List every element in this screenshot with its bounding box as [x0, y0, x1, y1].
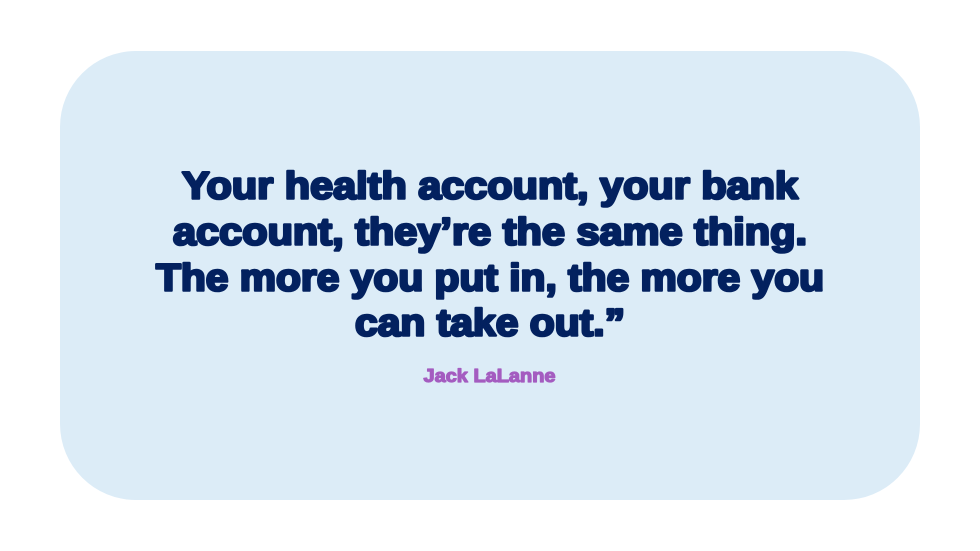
quote text: [156, 166, 824, 344]
quote text: The more you put in, the more you: [156, 258, 824, 300]
quote text: account, they’re the same thing.: [173, 212, 807, 254]
quote text: Your health account, your bank: [182, 166, 799, 208]
attribution: Jack LaLanne: Jack LaLanne: [424, 366, 556, 386]
panel: quote background: [60, 51, 920, 500]
quote text: can take out.”: [355, 302, 625, 344]
